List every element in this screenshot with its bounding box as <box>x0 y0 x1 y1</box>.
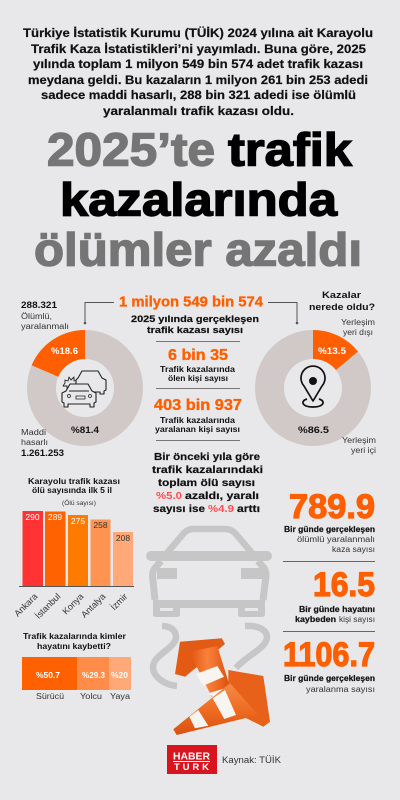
stat: deaths: 6 bin 35 <box>168 347 228 364</box>
stat: deaths: ölen kişi sayısı <box>168 374 228 383</box>
connector lines from headline to donuts <box>84 302 298 324</box>
donut labels: severity: yaralanmalı <box>21 322 69 331</box>
stat: daily injured: yaralanma sayısı <box>306 685 375 694</box>
text block: year over year change: toplam ölü sayısı <box>158 477 255 489</box>
bar chart: top 5 provinces: 275 <box>71 516 85 526</box>
donut labels: location: Yerleşim <box>342 436 376 445</box>
stat: daily crashes: ölümlü yaralanmalı <box>297 535 375 544</box>
icon: traffic cones <box>173 638 270 735</box>
intro text: yılında toplam 1 milyon 549 bin 574 adet trafik kazası <box>33 57 363 71</box>
icon: location pin <box>301 366 325 407</box>
stat: daily deaths <box>283 566 375 632</box>
bar chart: top 5 provinces: Karayolu trafik kazası <box>28 477 120 486</box>
bar chart: top 5 provinces: Konya <box>60 591 85 616</box>
stat: daily deaths: kişi sayısı <box>339 615 375 624</box>
intro text <box>23 25 373 118</box>
donut labels: severity: Maddi <box>21 428 46 437</box>
bar chart: top 5 provinces: (Ölü sayısı) <box>62 499 96 507</box>
text block: year over year change <box>152 451 263 515</box>
text block: year over year change: trafik kazalarındaki <box>152 464 263 476</box>
bar chart: top 5 provinces: 258 <box>93 520 108 530</box>
stacked bar: who died: Yolcu <box>80 692 102 701</box>
logo: Haber Türk: TURK <box>174 762 209 773</box>
title <box>34 124 362 276</box>
donut labels: severity: hasarlı <box>21 438 48 447</box>
donut chart: crash severity: %81.4 <box>71 425 100 436</box>
headline stat: total crashes: trafik kazası sayısı <box>147 325 243 336</box>
donut labels: severity: 1.261.253 <box>21 448 64 458</box>
donut labels: location: Kazalar <box>322 290 361 301</box>
bar chart: top 5 provinces: İzmir <box>109 591 129 612</box>
stat: daily injured <box>283 636 375 694</box>
donut labels: severity <box>21 300 69 458</box>
donut chart: crash location <box>270 330 358 436</box>
title: ölümler azaldı <box>34 224 362 276</box>
headline stat: total crashes: 2025 yılında gerçekleşen <box>131 314 259 325</box>
donut labels: severity: Ölümlü, <box>21 312 52 321</box>
stat: injured: 403 bin 937 <box>154 397 242 414</box>
stat: daily injured: Bir günde gerçekleşen <box>284 674 375 683</box>
headline stat: total crashes <box>119 294 264 336</box>
stat: deaths <box>156 341 240 383</box>
stat: injured <box>154 388 242 441</box>
stacked bar: who died: Trafik kazalarında kimler <box>23 631 127 641</box>
bar chart: top 5 provinces: Ankara <box>12 591 39 619</box>
donut chart: crash severity: %18.6 <box>51 346 78 357</box>
stat: injured: yaralanan kişi sayısı <box>155 425 240 434</box>
icon: colliding cars <box>62 371 106 407</box>
stat: daily deaths: kaybeden <box>295 615 336 624</box>
stacked bar: who died: %29.3 <box>82 670 105 680</box>
text block: year over year change: %4.9 <box>208 503 234 515</box>
stacked bar: who died: Sürücü <box>36 692 64 701</box>
stat: daily crashes: Bir günde gerçekleşen <box>284 525 375 534</box>
bar chart: top 5 provinces: İstanbul <box>33 591 62 621</box>
bar chart: top 5 provinces: 290 <box>25 512 40 522</box>
text block: year over year change: Bir önceki yıla göre <box>154 451 260 463</box>
title: kazalarında <box>60 174 337 226</box>
stat: injured: Trafik kazalarında <box>160 416 236 425</box>
title: trafik <box>228 124 352 176</box>
text block: year over year change: azaldı, yaralı <box>185 490 259 502</box>
logo: Haber Türk <box>167 745 217 774</box>
text block: year over year change: sayısı ise <box>153 503 205 515</box>
intro text: Türkiye İstatistik Kurumu (TÜİK) 2024 yılına ait Karayolu <box>23 25 373 40</box>
stat: daily injured: 1106.7 <box>283 636 375 674</box>
stacked bar: who died: %50.7 <box>36 670 60 680</box>
donut labels: location: yeri dışı <box>343 328 373 337</box>
bar chart: top 5 provinces: 208 <box>116 533 130 543</box>
stat: daily crashes <box>283 488 375 562</box>
donut labels: severity: 288.321 <box>21 300 57 310</box>
donut labels: location <box>309 290 376 455</box>
intro text: Trafik Kaza İstatistikleri’ni yayımladı. Buna göre, 2025 <box>31 41 366 56</box>
headline stat: total crashes: 1 milyon 549 bin 574 <box>119 294 264 310</box>
bar chart: top 5 provinces: 289 <box>48 512 62 522</box>
logo: Haber Türk: HABER <box>173 752 211 762</box>
intro text: meydana geldi. Bu kazaların 1 milyon 261 bin 253 adedi <box>28 73 368 87</box>
bar chart: top 5 provinces: Antalya <box>79 591 107 620</box>
stat: daily deaths: 16.5 <box>313 566 375 604</box>
text block: year over year change: %5.0 <box>156 490 182 502</box>
title: 2025’te <box>47 124 215 176</box>
bar chart: top 5 provinces <box>12 477 134 621</box>
stacked bar: who died: Yaya <box>110 692 131 701</box>
donut chart: crash location: %86.5 <box>298 425 330 436</box>
stacked bar: who died <box>22 631 131 701</box>
bar chart: top 5 provinces: ölü sayısında ilk 5 il <box>32 486 112 495</box>
source: Kaynak: TÜİK <box>222 755 281 765</box>
text block: year over year change: arttı <box>237 503 260 515</box>
stat: daily deaths: Bir günde hayatını <box>299 605 375 614</box>
intro text: yaralanmalı trafik kazası oldu. <box>103 104 294 118</box>
stat: daily crashes: kaza sayısı <box>332 545 375 554</box>
donut chart: crash location: %13.5 <box>318 346 347 357</box>
stacked bar: who died: %20 <box>111 670 128 680</box>
icon: grey car with skid marks <box>151 529 267 686</box>
intro text: sadece maddi hasarlı, 288 bin 321 adedi ise ölümlü <box>41 88 356 102</box>
stacked bar: who died: hayatını kaybetti? <box>37 641 111 651</box>
donut labels: location: yeri içi <box>351 446 376 455</box>
donut labels: location: nerede oldu? <box>309 302 375 313</box>
donut chart: crash severity <box>32 330 129 436</box>
donut labels: location: Yerleşim <box>341 318 375 327</box>
stat: daily crashes: 789.9 <box>289 488 375 526</box>
cone back <box>175 638 230 697</box>
stat: deaths: Trafik kazalarında <box>160 365 236 374</box>
cone front <box>173 670 270 735</box>
